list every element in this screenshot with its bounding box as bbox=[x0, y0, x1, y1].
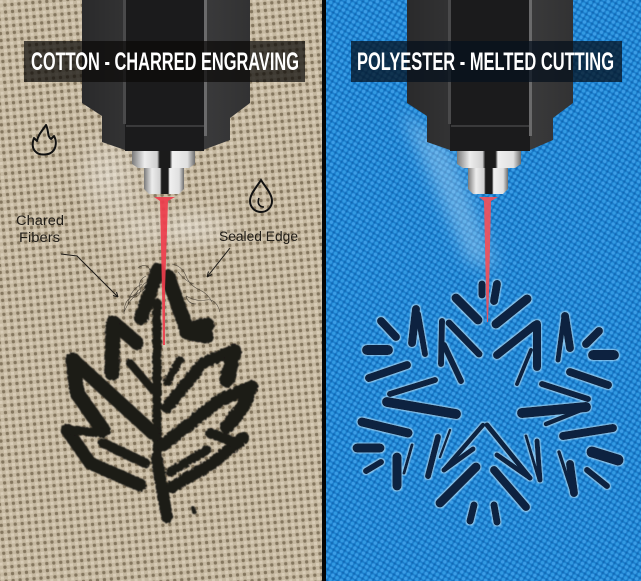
callout: charred fibers label bbox=[16, 215, 64, 242]
arrow: sealed edge bbox=[207, 248, 230, 277]
nozzle: polyester bbox=[407, 0, 573, 194]
panel: cotton bbox=[0, 0, 322, 581]
nozzle: cotton bbox=[82, 0, 250, 194]
charred fibers bbox=[124, 264, 220, 314]
title: cotton bbox=[24, 41, 305, 82]
laser beam: cotton bbox=[154, 197, 175, 345]
smoke haze bbox=[74, 136, 237, 256]
engraved leaf bbox=[67, 270, 251, 517]
callout: charred fibers label: Chared bbox=[16, 213, 64, 228]
divider bbox=[322, 0, 326, 581]
polyester fabric background bbox=[326, 0, 641, 581]
laser beam: polyester bbox=[479, 197, 498, 322]
vapor haze bbox=[400, 110, 498, 270]
icon: flame bbox=[33, 125, 56, 155]
callout: charred fibers label: Fibers bbox=[19, 230, 60, 245]
cut snowflake bbox=[357, 284, 618, 522]
arrow: charred fibers bbox=[61, 254, 118, 297]
callout: sealed edge label: Sealed Edge bbox=[219, 229, 298, 244]
panel: polyester bbox=[326, 0, 641, 581]
cotton fabric background bbox=[0, 0, 322, 581]
title: polyester bbox=[351, 41, 622, 82]
icon: water drop bbox=[250, 180, 272, 212]
title: cotton: COTTON - CHARRED ENGRAVING bbox=[31, 48, 299, 76]
